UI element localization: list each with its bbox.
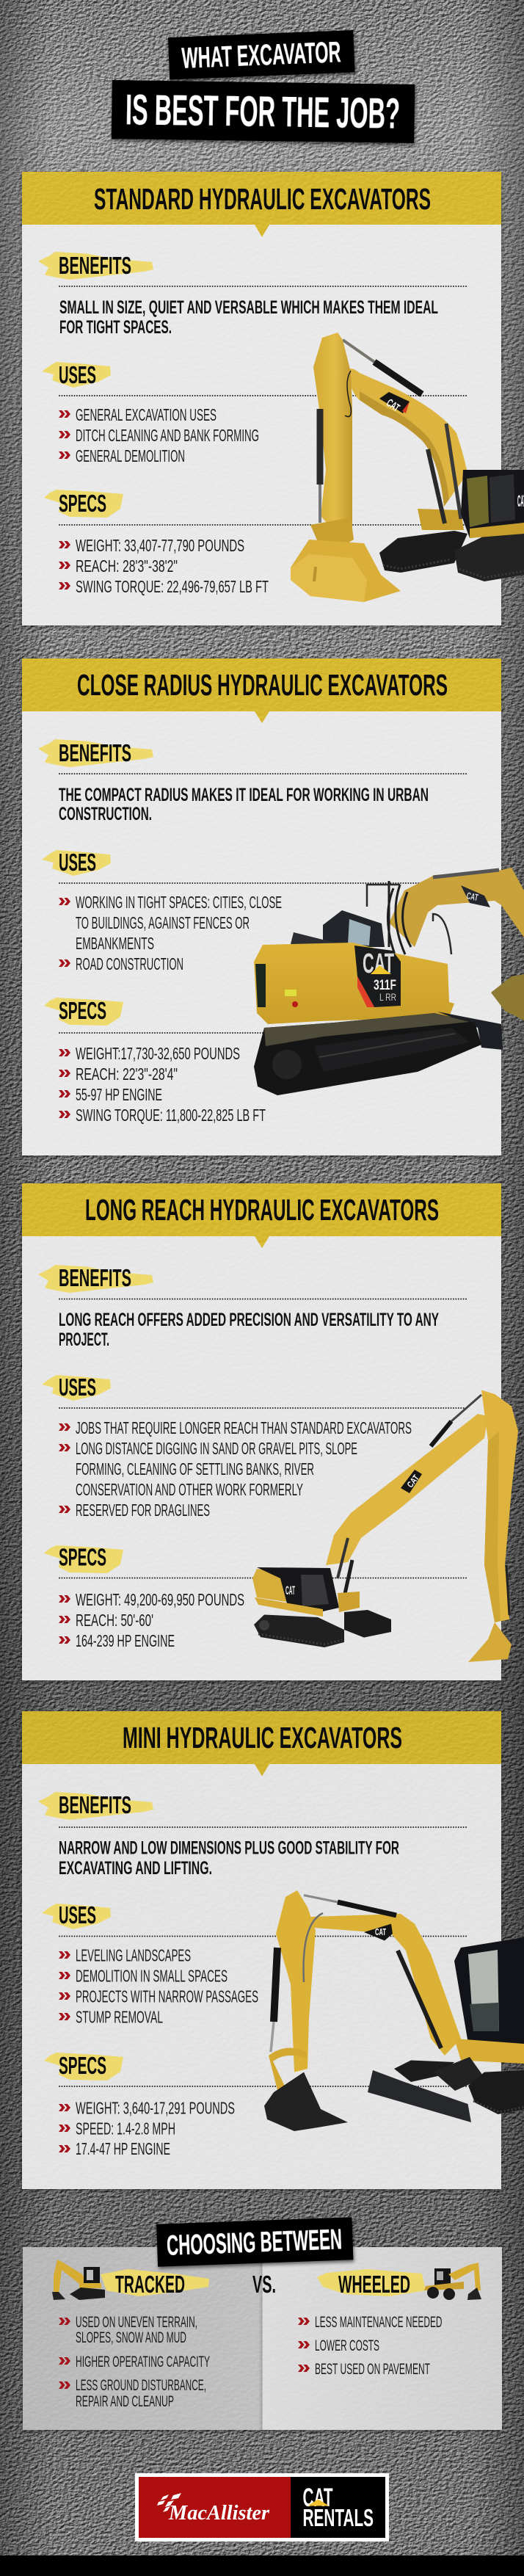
header banner	[22, 1183, 501, 1680]
uses list	[59, 1418, 412, 1520]
panel: mini hydraulic excavators	[22, 1711, 524, 2189]
vs label: VS.	[252, 2271, 276, 2298]
specs list: WEIGHT:17,730-32,650 POUNDS	[76, 1044, 240, 1063]
right column background	[263, 2247, 502, 2430]
tracked list: REPAIR AND CLEANUP	[76, 2393, 174, 2410]
benefits heading: BENEFITS	[59, 739, 131, 766]
tracked list: USED ON UNEVEN TERRAIN,	[76, 2314, 197, 2331]
title line 1: WHAT EXCAVATOR	[181, 36, 341, 75]
panel: standard hydraulic excavators	[22, 172, 524, 625]
specs list: SWING TORQUE: 11,800-22,825 LB FT	[76, 1106, 266, 1125]
tracked list: LESS GROUND DISTURBANCE,	[76, 2377, 206, 2394]
specs list	[59, 2098, 235, 2158]
icon: checkered flag	[157, 2493, 181, 2512]
logo: MacAllister Cat Rentals: MacAllister	[168, 2502, 270, 2525]
specs heading	[44, 490, 123, 518]
uses list: DITCH CLEANING AND BANK FORMING	[76, 426, 259, 445]
benefits heading: BENEFITS	[59, 1264, 131, 1291]
uses list	[59, 405, 259, 465]
benefits text: CONSTRUCTION.	[59, 804, 152, 824]
excavator: mini: CAT	[375, 1926, 386, 1937]
uses heading: USES	[59, 1901, 96, 1929]
tracked heading with excavator icon: TRACKED	[115, 2271, 185, 2298]
left column background	[23, 2247, 263, 2430]
wheeled heading with excavator icon	[317, 2263, 481, 2300]
excavator: standard	[291, 333, 524, 602]
tracked list: HIGHER OPERATING CAPACITY	[76, 2354, 210, 2370]
wheeled list: LOWER COSTS	[315, 2337, 379, 2354]
benefits text	[59, 1310, 439, 1350]
uses heading: USES	[59, 849, 96, 876]
panel: tracked vs wheeled	[23, 2217, 502, 2430]
benefits text: PROJECT.	[59, 1329, 109, 1350]
benefits heading	[38, 739, 153, 767]
specs heading	[44, 997, 123, 1026]
uses list: GENERAL DEMOLITION	[76, 446, 185, 465]
heading: choosing between: CHOOSING BETWEEN	[166, 2224, 343, 2262]
logo: MacAllister Cat Rentals: RENTALS	[302, 2504, 374, 2531]
wheeled list: BEST USED ON PAVEMENT	[315, 2361, 430, 2378]
tracked list	[59, 2314, 210, 2410]
tracked list: SLOPES, SNOW AND MUD	[76, 2329, 186, 2346]
benefits text: FOR TIGHT SPACES.	[59, 317, 172, 338]
benefits text: EXCAVATING AND LIFTING.	[59, 1858, 212, 1879]
specs list: REACH: 22'3"-28'4"	[76, 1064, 178, 1084]
specs list: 17.4-47 HP ENGINE	[76, 2139, 170, 2158]
excavator: close radius	[254, 868, 524, 1095]
benefits heading: BENEFITS	[59, 252, 131, 279]
excavator: long reach: CAT	[405, 1473, 421, 1490]
specs list	[59, 1044, 266, 1125]
title	[112, 30, 415, 143]
heading: choosing between	[156, 2217, 353, 2267]
specs heading: SPECS	[59, 490, 106, 517]
uses list: STUMP REMOVAL	[76, 2007, 163, 2026]
panel: long reach hydraulic excavators	[22, 1183, 518, 1680]
specs list: 55-97 HP ENGINE	[76, 1085, 162, 1104]
logo: MacAllister Cat Rentals: CAT	[302, 2484, 333, 2512]
benefits heading	[38, 252, 153, 280]
uses list: EMBANKMENTS	[76, 934, 154, 953]
logo: MacAllister Cat Rentals	[135, 2473, 389, 2541]
wheeled list	[298, 2314, 442, 2378]
uses heading	[42, 1374, 111, 1401]
benefits text	[59, 785, 429, 824]
uses heading: USES	[59, 361, 96, 388]
specs list: SPEED: 1.4-2.8 MPH	[76, 2119, 175, 2138]
uses heading: USES	[59, 1374, 96, 1401]
specs heading: SPECS	[59, 997, 106, 1024]
wheeled heading with excavator icon: WHEELED	[338, 2271, 410, 2298]
excavator: mini	[264, 1890, 524, 2131]
specs list: REACH: 50'-60'	[76, 1611, 153, 1630]
uses list: ROAD CONSTRUCTION	[76, 954, 183, 973]
excavator: close radius: CAT	[363, 948, 394, 979]
specs list: WEIGHT: 3,640-17,291 POUNDS	[76, 2098, 235, 2117]
uses heading	[42, 1901, 111, 1929]
title line 2	[112, 80, 415, 143]
excavator: close radius: L RR	[379, 991, 396, 1003]
uses list	[59, 893, 282, 973]
excavator: long reach	[252, 1390, 518, 1662]
panel: close radius hydraulic excavators	[22, 658, 524, 1155]
specs list	[59, 1590, 244, 1650]
uses list: TO BUILDINGS, AGAINST FENCES OR	[76, 913, 250, 932]
specs list: WEIGHT: 33,407-77,790 POUNDS	[76, 536, 244, 555]
uses list: LEVELING LANDSCAPES	[76, 1945, 191, 1964]
specs heading	[44, 2052, 123, 2080]
benefits heading	[38, 1791, 153, 1820]
uses list: RESERVED FOR DRAGLINES	[76, 1501, 210, 1520]
specs heading: SPECS	[59, 1543, 106, 1571]
specs list: REACH: 28'3"-38'2"	[76, 556, 178, 576]
excavator: standard: CAT	[384, 396, 402, 415]
specs heading	[44, 1543, 123, 1573]
tracked heading with excavator icon	[52, 2260, 209, 2300]
specs heading: SPECS	[59, 2052, 106, 2079]
benefits heading	[38, 1264, 153, 1293]
excavator: long reach: CAT	[285, 1583, 295, 1597]
title line 1	[168, 30, 355, 80]
excavator: close radius: CAT	[465, 890, 479, 903]
uses list	[59, 1945, 258, 2026]
specs list: 164-239 HP ENGINE	[76, 1631, 175, 1650]
uses list: PROJECTS WITH NARROW PASSAGES	[76, 1987, 258, 2006]
header banner	[22, 172, 501, 625]
header banner	[22, 1711, 501, 2189]
header banner	[22, 658, 501, 1155]
specs list: SWING TORQUE: 22,496-79,657 LB FT	[76, 577, 269, 596]
uses list: WORKING IN TIGHT SPACES: CITIES, CLOSE	[76, 893, 282, 912]
benefits text	[59, 297, 438, 338]
benefits heading: BENEFITS	[59, 1791, 131, 1818]
uses heading	[42, 849, 111, 876]
uses list: DEMOLITION IN SMALL SPACES	[76, 1966, 228, 1985]
excavator: close radius: 311F	[374, 978, 396, 993]
uses heading	[42, 361, 111, 388]
uses list: GENERAL EXCAVATION USES	[76, 405, 216, 424]
uses list: CONSERVATION AND OTHER WORK FORMERLY	[76, 1480, 303, 1499]
uses list: FORMING, CLEANING OF SETTLING BANKS, RIVER	[76, 1459, 314, 1479]
specs list	[59, 536, 269, 596]
benefits text	[59, 1838, 399, 1879]
specs list: WEIGHT: 49,200-69,950 POUNDS	[76, 1590, 244, 1609]
